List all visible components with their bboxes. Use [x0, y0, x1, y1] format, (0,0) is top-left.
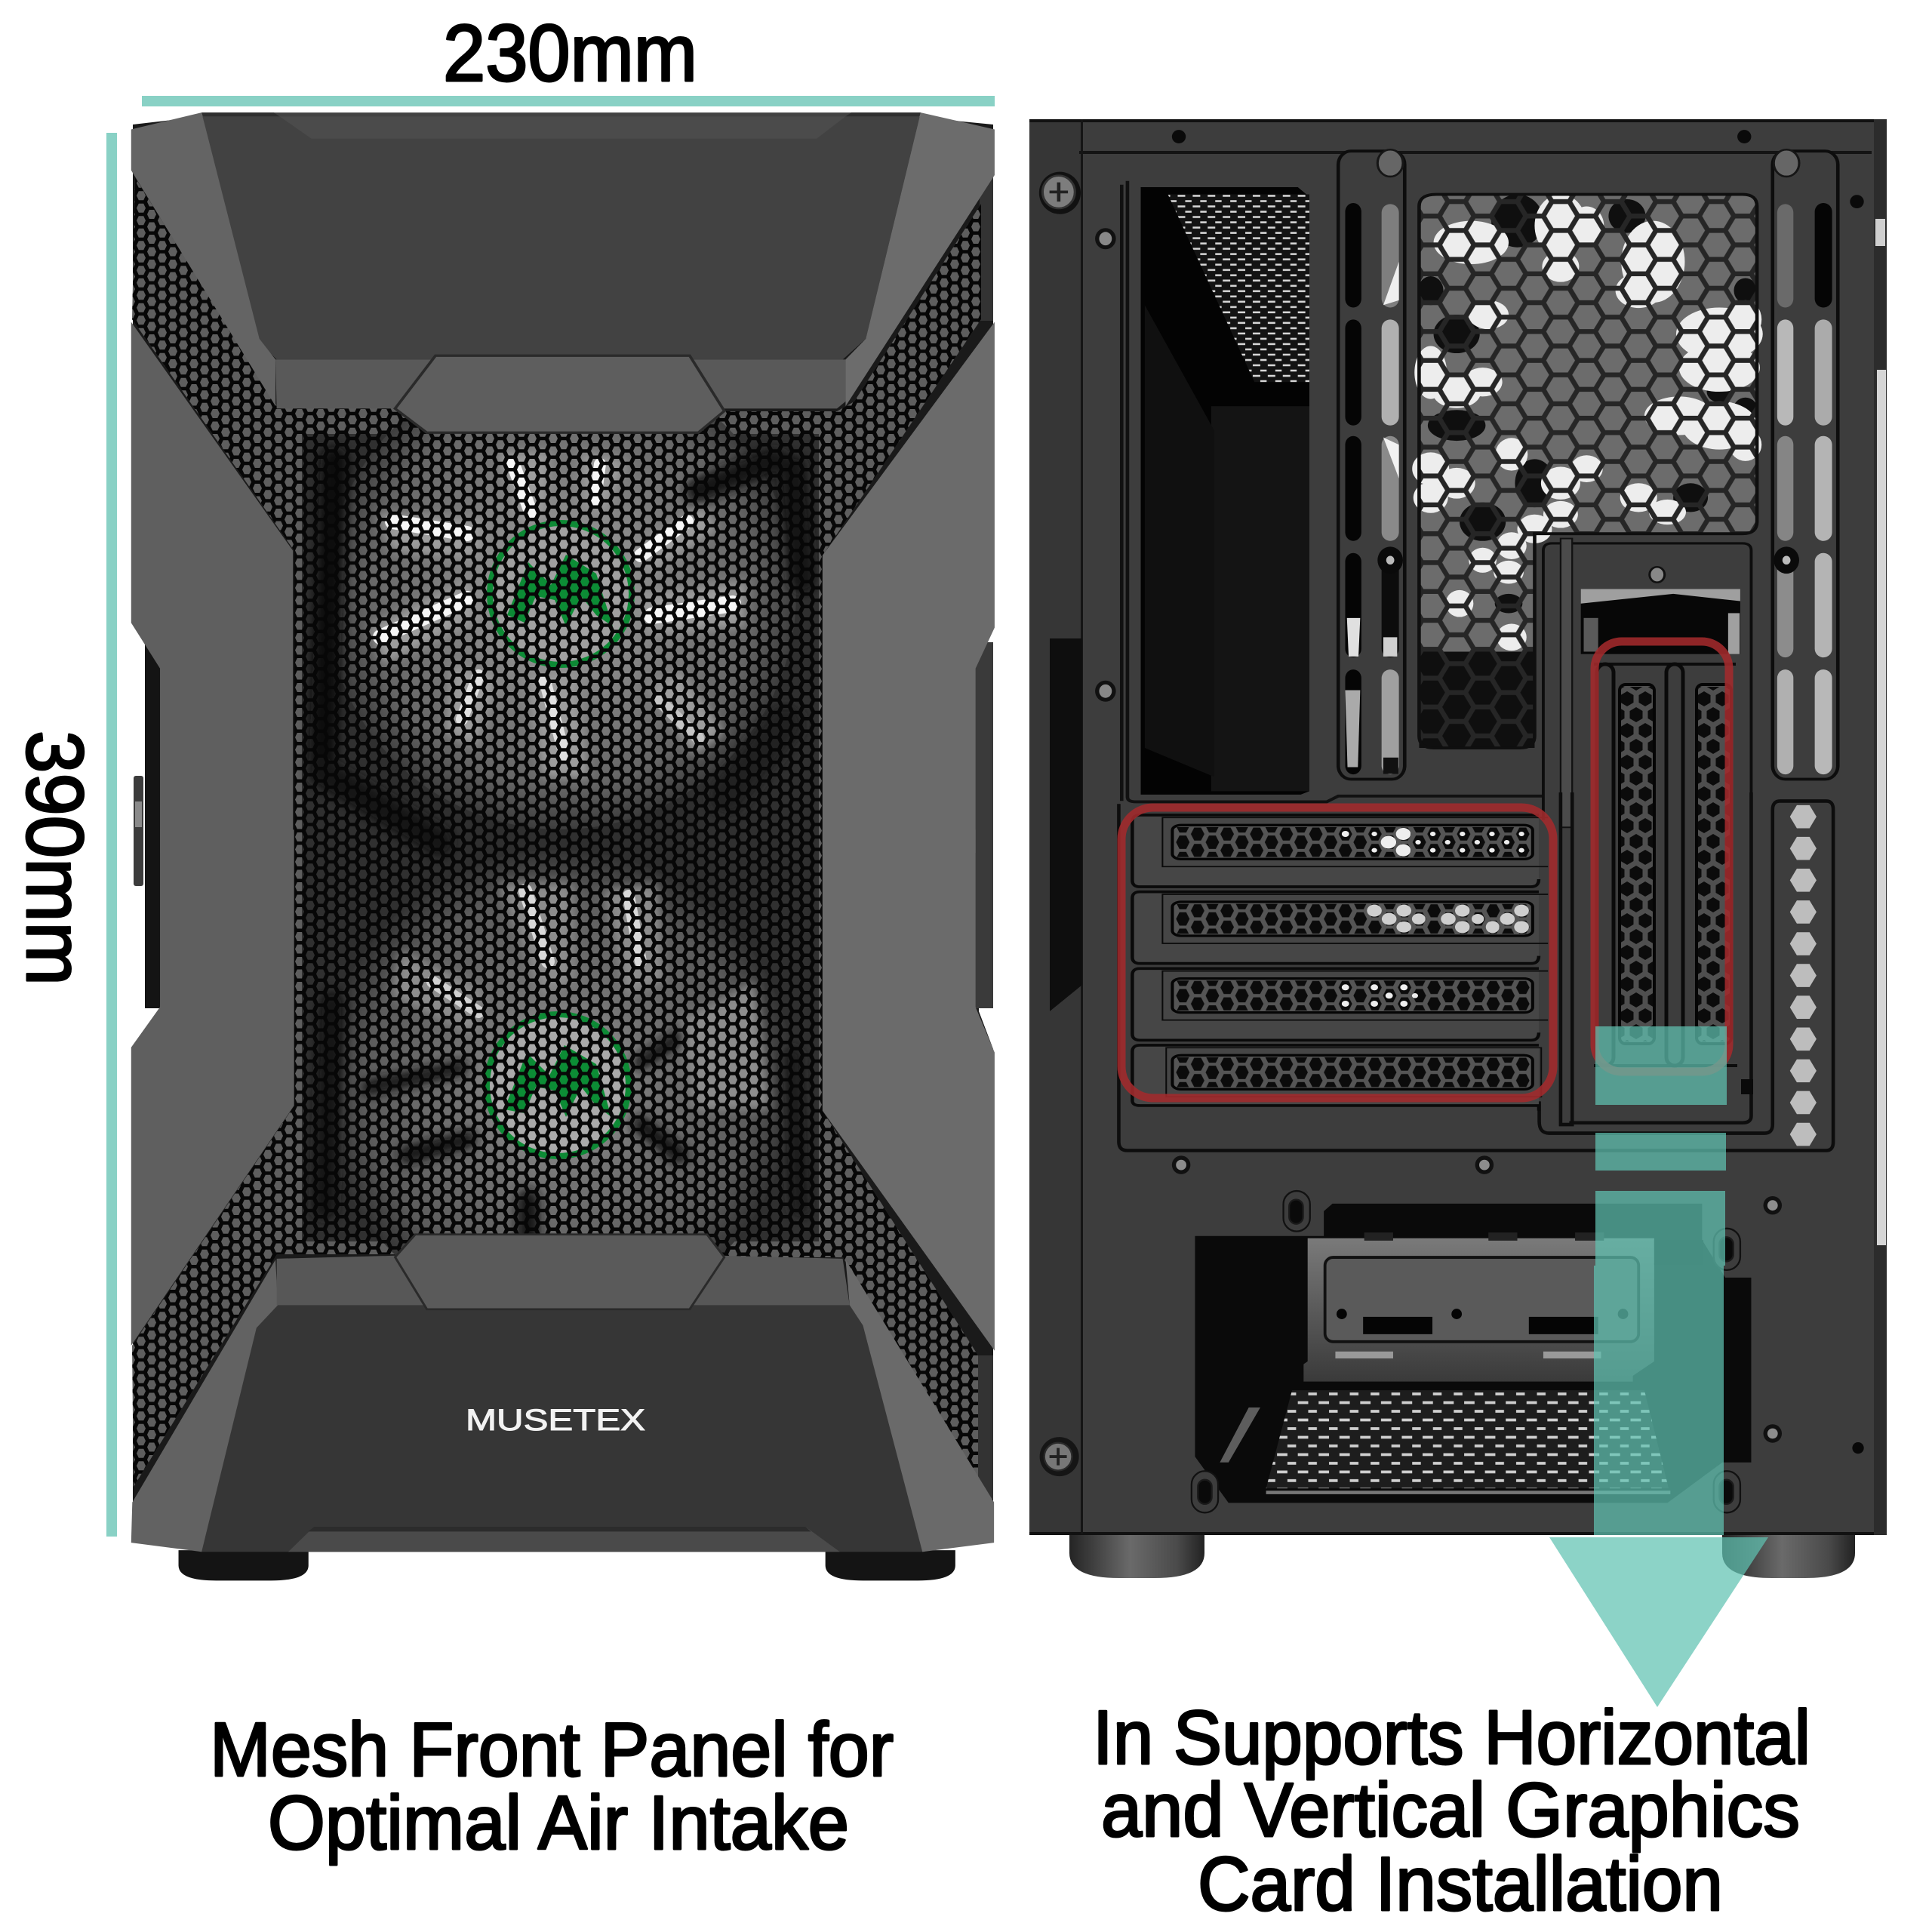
height dimension bar — [106, 133, 117, 1537]
fan 2 behind mesh — [323, 850, 800, 1321]
case backing silhouette — [133, 115, 993, 1550]
lower side panels and bottom dark panel — [131, 829, 995, 1552]
slot 4 — [1132, 1045, 1541, 1111]
thumb screw lower — [1040, 1437, 1079, 1476]
frame lines — [1121, 181, 1543, 801]
upper rear area — [1039, 130, 1864, 827]
top centre tab — [395, 355, 724, 432]
vertical GPU bracket upper — [1543, 539, 1751, 827]
fan honeycomb grill — [1412, 195, 1763, 748]
caption: graphics card installation: In Supports Horizontal — [1093, 1696, 1810, 1780]
PSU opening — [1195, 1204, 1751, 1503]
top dark panel and wings — [131, 112, 995, 853]
bottom centre tab — [395, 1235, 724, 1309]
fan bay dark background — [302, 434, 819, 1241]
caption: mesh front panel — [210, 1708, 894, 1866]
side handle — [1050, 638, 1082, 1011]
dimension label: width 230mm: 230mm — [443, 8, 697, 98]
dimension label: height 390mm: 390mm — [10, 731, 100, 986]
thumb screw — [1039, 172, 1081, 214]
vented slot panel right — [1773, 149, 1838, 779]
outer side strips and IO buttons — [134, 170, 993, 1499]
slot 2 — [1132, 892, 1548, 964]
mounting holes — [1172, 130, 1864, 208]
fan 1 hub with green logo — [490, 523, 632, 665]
panel: rear view of case — [1029, 119, 1887, 1578]
vertical expansion slots — [1594, 664, 1753, 1094]
caption: graphics card installation — [1093, 1696, 1810, 1927]
panel: front view of case — [131, 112, 995, 1580]
fan 2 hub with green logo — [487, 1014, 629, 1156]
case edge strips — [1029, 119, 1887, 1535]
horizontal expansion slots — [1132, 815, 1548, 1111]
red highlight: vertical slots — [1595, 641, 1729, 1072]
case body — [1029, 119, 1887, 1535]
expansion slot frame — [1118, 792, 1833, 1150]
arrow: vertical installation direction — [1549, 1026, 1768, 1707]
vented slot panel left — [1338, 149, 1404, 779]
right side panel — [823, 322, 995, 853]
caption: graphics card installation: Card Installation — [1198, 1842, 1723, 1927]
perforated mesh front — [132, 177, 981, 1487]
mesh underlay: arms and fan bay — [132, 177, 981, 1487]
caption: graphics card installation: and Vertical Graphics — [1101, 1768, 1800, 1853]
caption: mesh front panel: Mesh Front Panel for — [210, 1708, 894, 1792]
caption: mesh front panel: Optimal Air Intake — [268, 1781, 849, 1866]
PSU slots — [1192, 1191, 1740, 1512]
small frame screws — [1095, 228, 1116, 702]
vertical slot 1 — [1620, 685, 1654, 1044]
case feet, rear view — [1069, 1532, 1855, 1578]
left side panel — [131, 322, 293, 853]
hex column panel — [1790, 805, 1817, 1146]
vertical slot 2 — [1697, 685, 1731, 1044]
slot 3 — [1132, 968, 1548, 1040]
fan 1 behind mesh — [323, 358, 802, 841]
slot 1 — [1132, 815, 1548, 887]
motherboard window — [1141, 187, 1309, 795]
red highlight: horizontal slots — [1121, 808, 1553, 1098]
PSU floor mesh — [1220, 1390, 1670, 1493]
PSU mounting plate — [1303, 1232, 1703, 1382]
case feet, front view — [179, 1550, 955, 1580]
small screws — [1172, 1155, 1864, 1454]
brand logo: MUSETEX — [466, 1404, 645, 1437]
lower rear area, PSU bay — [1040, 1155, 1864, 1512]
width dimension bar — [142, 96, 995, 106]
